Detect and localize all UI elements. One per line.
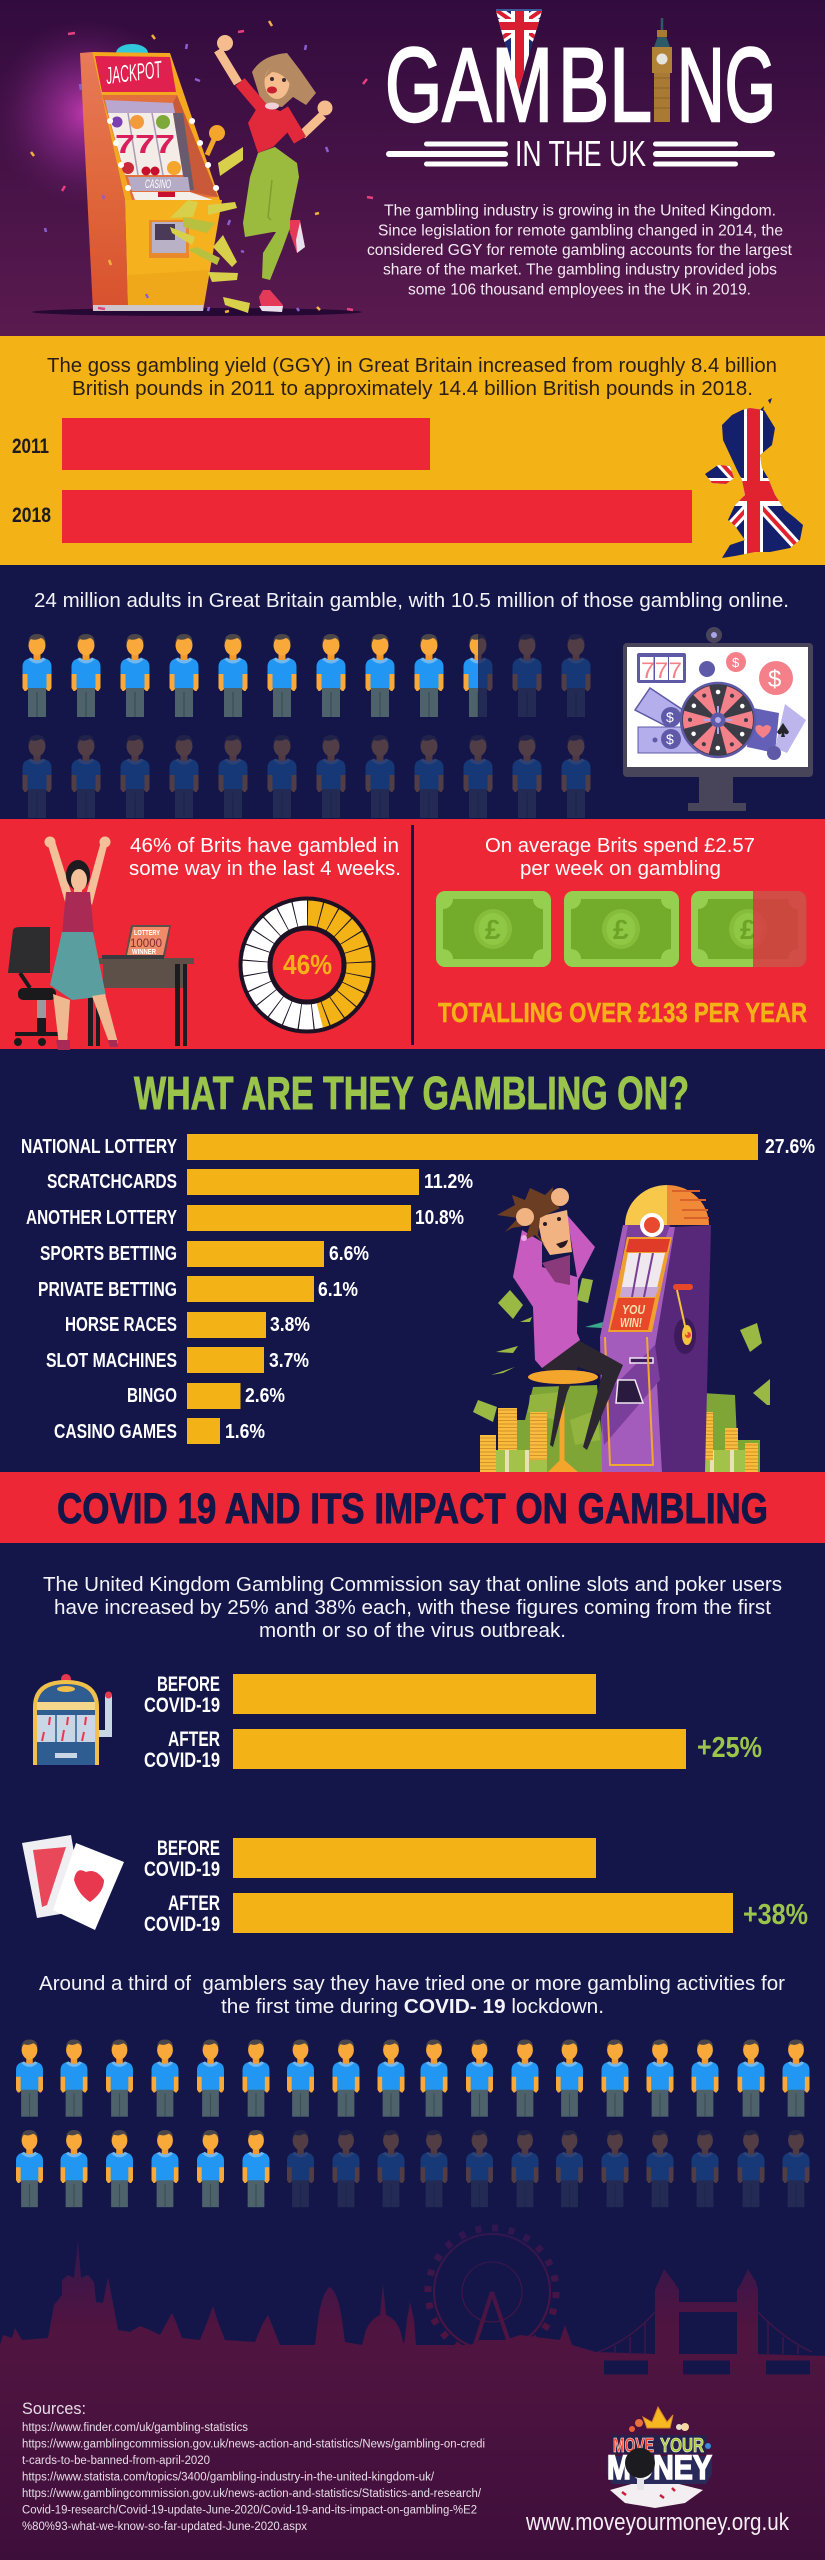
money piles and coins bbox=[480, 1385, 760, 1472]
text: 46% of Brits: some way in the last 4 weeks. bbox=[129, 858, 401, 880]
lit figures bbox=[16, 2040, 809, 2207]
main title word: I bbox=[655, 104, 661, 126]
row: private betting bbox=[38, 1276, 358, 1302]
Tower Bridge openings bbox=[604, 2312, 810, 2374]
row: private betting: 6.1% bbox=[318, 1279, 358, 1301]
intro paragraph: share of the market. The gambling industry provided jobs bbox=[383, 262, 777, 278]
Tower Bridge cables bbox=[598, 2312, 812, 2354]
donut chart: 46%: 46% bbox=[283, 949, 332, 980]
website URL: www.moveyourmoney.org.uk bbox=[525, 2509, 790, 2536]
bar chart: online slots before and after bbox=[144, 1673, 762, 1772]
row: horse races: 3.8% bbox=[270, 1314, 310, 1336]
row: bingo bbox=[127, 1383, 285, 1409]
panel: covid heading band bbox=[0, 1472, 825, 1543]
intro paragraph bbox=[367, 202, 793, 298]
row: sports betting bbox=[40, 1241, 369, 1267]
panel: red stats background bbox=[0, 819, 825, 1049]
GGY text bbox=[47, 354, 777, 400]
third of gamblers text bbox=[39, 1973, 785, 2018]
illustration: woman at desk celebrating: WINNER bbox=[132, 949, 156, 956]
main title word: GAM bbox=[385, 27, 553, 144]
text: 46% of Brits bbox=[129, 835, 401, 880]
covid paragraph bbox=[43, 1574, 782, 1642]
title: Gambling in the UK bbox=[385, 10, 776, 174]
labels: COVID-19 bbox=[144, 1858, 220, 1881]
subtitle with stripes bbox=[386, 133, 775, 174]
panel: weekly spend bbox=[436, 835, 807, 1028]
sources: %80%93-what-we-know-so-far-updated-June-2020.aspx bbox=[22, 2521, 307, 2533]
icon: online casino monitor bbox=[623, 627, 813, 811]
row: bingo: 2.6% bbox=[245, 1385, 285, 1407]
main title word: BL bbox=[558, 27, 652, 144]
intro paragraph: some 106 thousand employees in the UK in 2019. bbox=[408, 282, 751, 298]
illustration: woman at desk celebrating: LOTTERY bbox=[134, 930, 160, 937]
icon: online casino monitor: $ bbox=[666, 709, 674, 725]
panel: navy adults background bbox=[0, 565, 825, 819]
labels: AFTER bbox=[168, 1892, 220, 1915]
bar chart: GGY 2011 vs 2018 bbox=[12, 418, 692, 543]
row: another lottery: 10.8% bbox=[415, 1207, 464, 1229]
icon: online casino monitor: $ bbox=[768, 666, 781, 693]
slot machine: WIN! bbox=[620, 1315, 642, 1330]
labels bbox=[144, 1673, 220, 1772]
donut chart: 46% bbox=[240, 898, 374, 1032]
sources: https://www.statista.com/topics/3400/gambling-industry-in-the-united-kingdom-uk/ bbox=[22, 2472, 435, 2484]
row: scratchcards bbox=[47, 1169, 473, 1195]
labels: BEFORE bbox=[157, 1837, 220, 1860]
row: private betting: PRIVATE BETTING bbox=[38, 1279, 177, 1301]
text: weekly spend: On average Brits spend £2.57 bbox=[485, 835, 755, 857]
intro paragraph: Since legislation for remote gambling changed in 2014, the bbox=[378, 222, 783, 240]
icon: slot machine bbox=[33, 1674, 112, 1765]
bar 2018: 2018 bbox=[12, 504, 51, 527]
labels: AFTER bbox=[168, 1728, 220, 1751]
row: horse races: HORSE RACES bbox=[65, 1314, 177, 1336]
sources: t-cards-to-be-banned-from-april-2020 bbox=[22, 2455, 210, 2467]
flying banknotes bbox=[170, 147, 250, 313]
Big Ben tower replacing the letter I bbox=[652, 18, 672, 122]
row: casino games: 1.6% bbox=[225, 1421, 265, 1443]
covid paragraph: The United Kingdom Gambling Commission say that online slots and poker users bbox=[43, 1574, 782, 1596]
intro paragraph: The gambling industry is growing in the United Kingdom. bbox=[384, 202, 776, 220]
slot machine bbox=[80, 44, 225, 311]
logo: Move Your Money: MONEY bbox=[607, 2449, 712, 2487]
slot machine: YOU bbox=[622, 1302, 645, 1317]
intro paragraph: considered GGY for remote gambling accounts for the largest bbox=[367, 242, 793, 259]
adults text: 24 million adults in Great Britain gamble, with 10.5 million of those gambling online. bbox=[34, 590, 789, 612]
row: bingo: BINGO bbox=[127, 1385, 177, 1407]
floor shadow bbox=[32, 308, 362, 316]
dim figures bbox=[287, 2130, 809, 2207]
dim figures bbox=[22, 634, 590, 818]
bar chart: poker before and after bbox=[144, 1837, 808, 1936]
panel: header background bbox=[0, 0, 825, 336]
value +25%: +25% bbox=[697, 1732, 762, 1764]
London Eye bbox=[428, 2228, 556, 2360]
logo: Move Your Money: MOVE bbox=[613, 2435, 654, 2457]
icon: online casino monitor: $ bbox=[666, 731, 674, 747]
row: slot machines: 3.7% bbox=[269, 1350, 309, 1372]
icon: banknote 1: £ bbox=[485, 914, 501, 945]
lit figures bbox=[22, 634, 492, 717]
row: sports betting: SPORTS BETTING bbox=[40, 1243, 177, 1265]
slot machine: 777 bbox=[115, 129, 175, 159]
map: UK filled with Union Jack bbox=[705, 398, 803, 558]
covid paragraph: month or so of the virus outbreak. bbox=[259, 1620, 566, 1642]
panel: 46% of Brits bbox=[8, 835, 401, 1050]
row: another lottery bbox=[26, 1205, 464, 1231]
labels: COVID-19 bbox=[144, 1694, 220, 1717]
bar chart: gambling activities bbox=[21, 1134, 815, 1444]
row: another lottery: ANOTHER LOTTERY bbox=[26, 1207, 178, 1229]
icon: banknote 2: £ bbox=[613, 914, 629, 945]
value +38%: +38% bbox=[743, 1899, 808, 1931]
row: national lottery bbox=[21, 1134, 815, 1160]
illustration: distressed man at slot machine bbox=[473, 1185, 770, 1472]
labels bbox=[144, 1837, 220, 1936]
covid paragraph: have increased by 25% and 38% each, with these figures coming from the first bbox=[54, 1597, 771, 1619]
panel: yellow GGY background bbox=[0, 336, 825, 565]
subtitle with stripes: IN THE UK bbox=[515, 133, 646, 174]
footer background bbox=[0, 2360, 825, 2560]
panel: covid navy background bbox=[0, 1543, 825, 2383]
man on stool bbox=[497, 1187, 623, 1472]
icon: online casino monitor: 777 bbox=[641, 658, 682, 683]
GGY text: The goss gambling yield (GGY) in Great Britain increased from roughly 8.4 billion bbox=[47, 354, 777, 377]
third of gamblers text: Around a third of gamblers say they have tried one or more gambling activities for bbox=[39, 1973, 785, 1995]
illustration: woman at desk celebrating bbox=[8, 836, 194, 1050]
row: scratchcards: SCRATCHCARDS bbox=[47, 1171, 177, 1193]
row: national lottery: NATIONAL LOTTERY bbox=[21, 1136, 178, 1158]
sources: https://www.finder.com/uk/gambling-statistics bbox=[22, 2422, 248, 2434]
text: weekly spend: per week on gambling bbox=[520, 858, 721, 880]
labels: BEFORE bbox=[157, 1673, 220, 1696]
icon: online casino monitor: $ bbox=[732, 655, 740, 670]
bar 2018 bbox=[12, 490, 692, 543]
slot machine: JACKPOT bbox=[104, 56, 164, 90]
labels: COVID-19 bbox=[144, 1913, 220, 1936]
sources bbox=[22, 2399, 485, 2533]
row: casino games bbox=[54, 1418, 265, 1444]
row: casino games: CASINO GAMES bbox=[54, 1421, 177, 1443]
row: national lottery: 27.6% bbox=[765, 1136, 815, 1158]
logo: Move Your Money: YOUR bbox=[660, 2435, 704, 2457]
divider between red panels bbox=[411, 825, 414, 1045]
skyline silhouette bbox=[0, 2240, 825, 2365]
slot machine bbox=[600, 1185, 711, 1472]
row: horse races bbox=[65, 1312, 310, 1338]
sources: https://www.gamblingcommission.gov.uk/news-action-and-statistics/News/gambling-on-credi bbox=[22, 2438, 485, 2450]
flying bills bbox=[473, 1278, 770, 1422]
GGY text: British pounds in 2011 to approximately 14.4 billion British pounds in 2018. bbox=[72, 377, 753, 400]
glow behind machine bbox=[0, 18, 182, 208]
third of gamblers text: the first time during COVID- 19 lockdown. bbox=[221, 1996, 604, 2018]
pennant: Union Jack bbox=[496, 10, 542, 94]
sources: Sources: bbox=[22, 2399, 86, 2418]
row: scratchcards: 11.2% bbox=[424, 1171, 473, 1193]
confetti bbox=[31, 21, 373, 312]
illustration: woman at desk celebrating: 10000 bbox=[130, 936, 162, 950]
illustration: jackpot slot machine and cheering woman bbox=[0, 18, 373, 316]
icon: banknote 1 bbox=[436, 891, 551, 967]
illustration: London skyline bbox=[0, 2228, 825, 2560]
icon: playing cards bbox=[22, 1835, 124, 1930]
bar 2011: 2011 bbox=[12, 435, 49, 458]
sources: https://www.gamblingcommission.gov.uk/news-action-and-statistics/Statistics-and-research/ bbox=[22, 2488, 482, 2500]
bar 2011 bbox=[12, 418, 430, 470]
labels: COVID-19 bbox=[144, 1749, 220, 1772]
row: slot machines bbox=[46, 1347, 309, 1373]
text: 46% of Brits: 46% of Brits have gambled in bbox=[130, 835, 399, 857]
icon: partial banknote 3: £ bbox=[740, 914, 756, 945]
woman bbox=[217, 35, 332, 312]
row: slot machines: SLOT MACHINES bbox=[46, 1350, 177, 1372]
sources: Covid-19-research/Covid-19-update-June-2020/Covid-19-and-its-impact-on-gambling-%E2 bbox=[22, 2504, 477, 2516]
pictogram: 24 adults, 10.5 gambling online bbox=[22, 634, 590, 818]
panel: navy gambling-on background bbox=[0, 1049, 825, 1472]
pictogram: a third of gamblers bbox=[16, 2040, 809, 2207]
slot machine: CASINO bbox=[145, 177, 171, 191]
row: sports betting: 6.6% bbox=[329, 1243, 369, 1265]
icon: partial banknote 3 bbox=[691, 891, 807, 967]
logo: Move Your Money bbox=[607, 2407, 712, 2508]
icon: banknote 2 bbox=[564, 891, 679, 967]
text: weekly spend bbox=[485, 835, 755, 880]
